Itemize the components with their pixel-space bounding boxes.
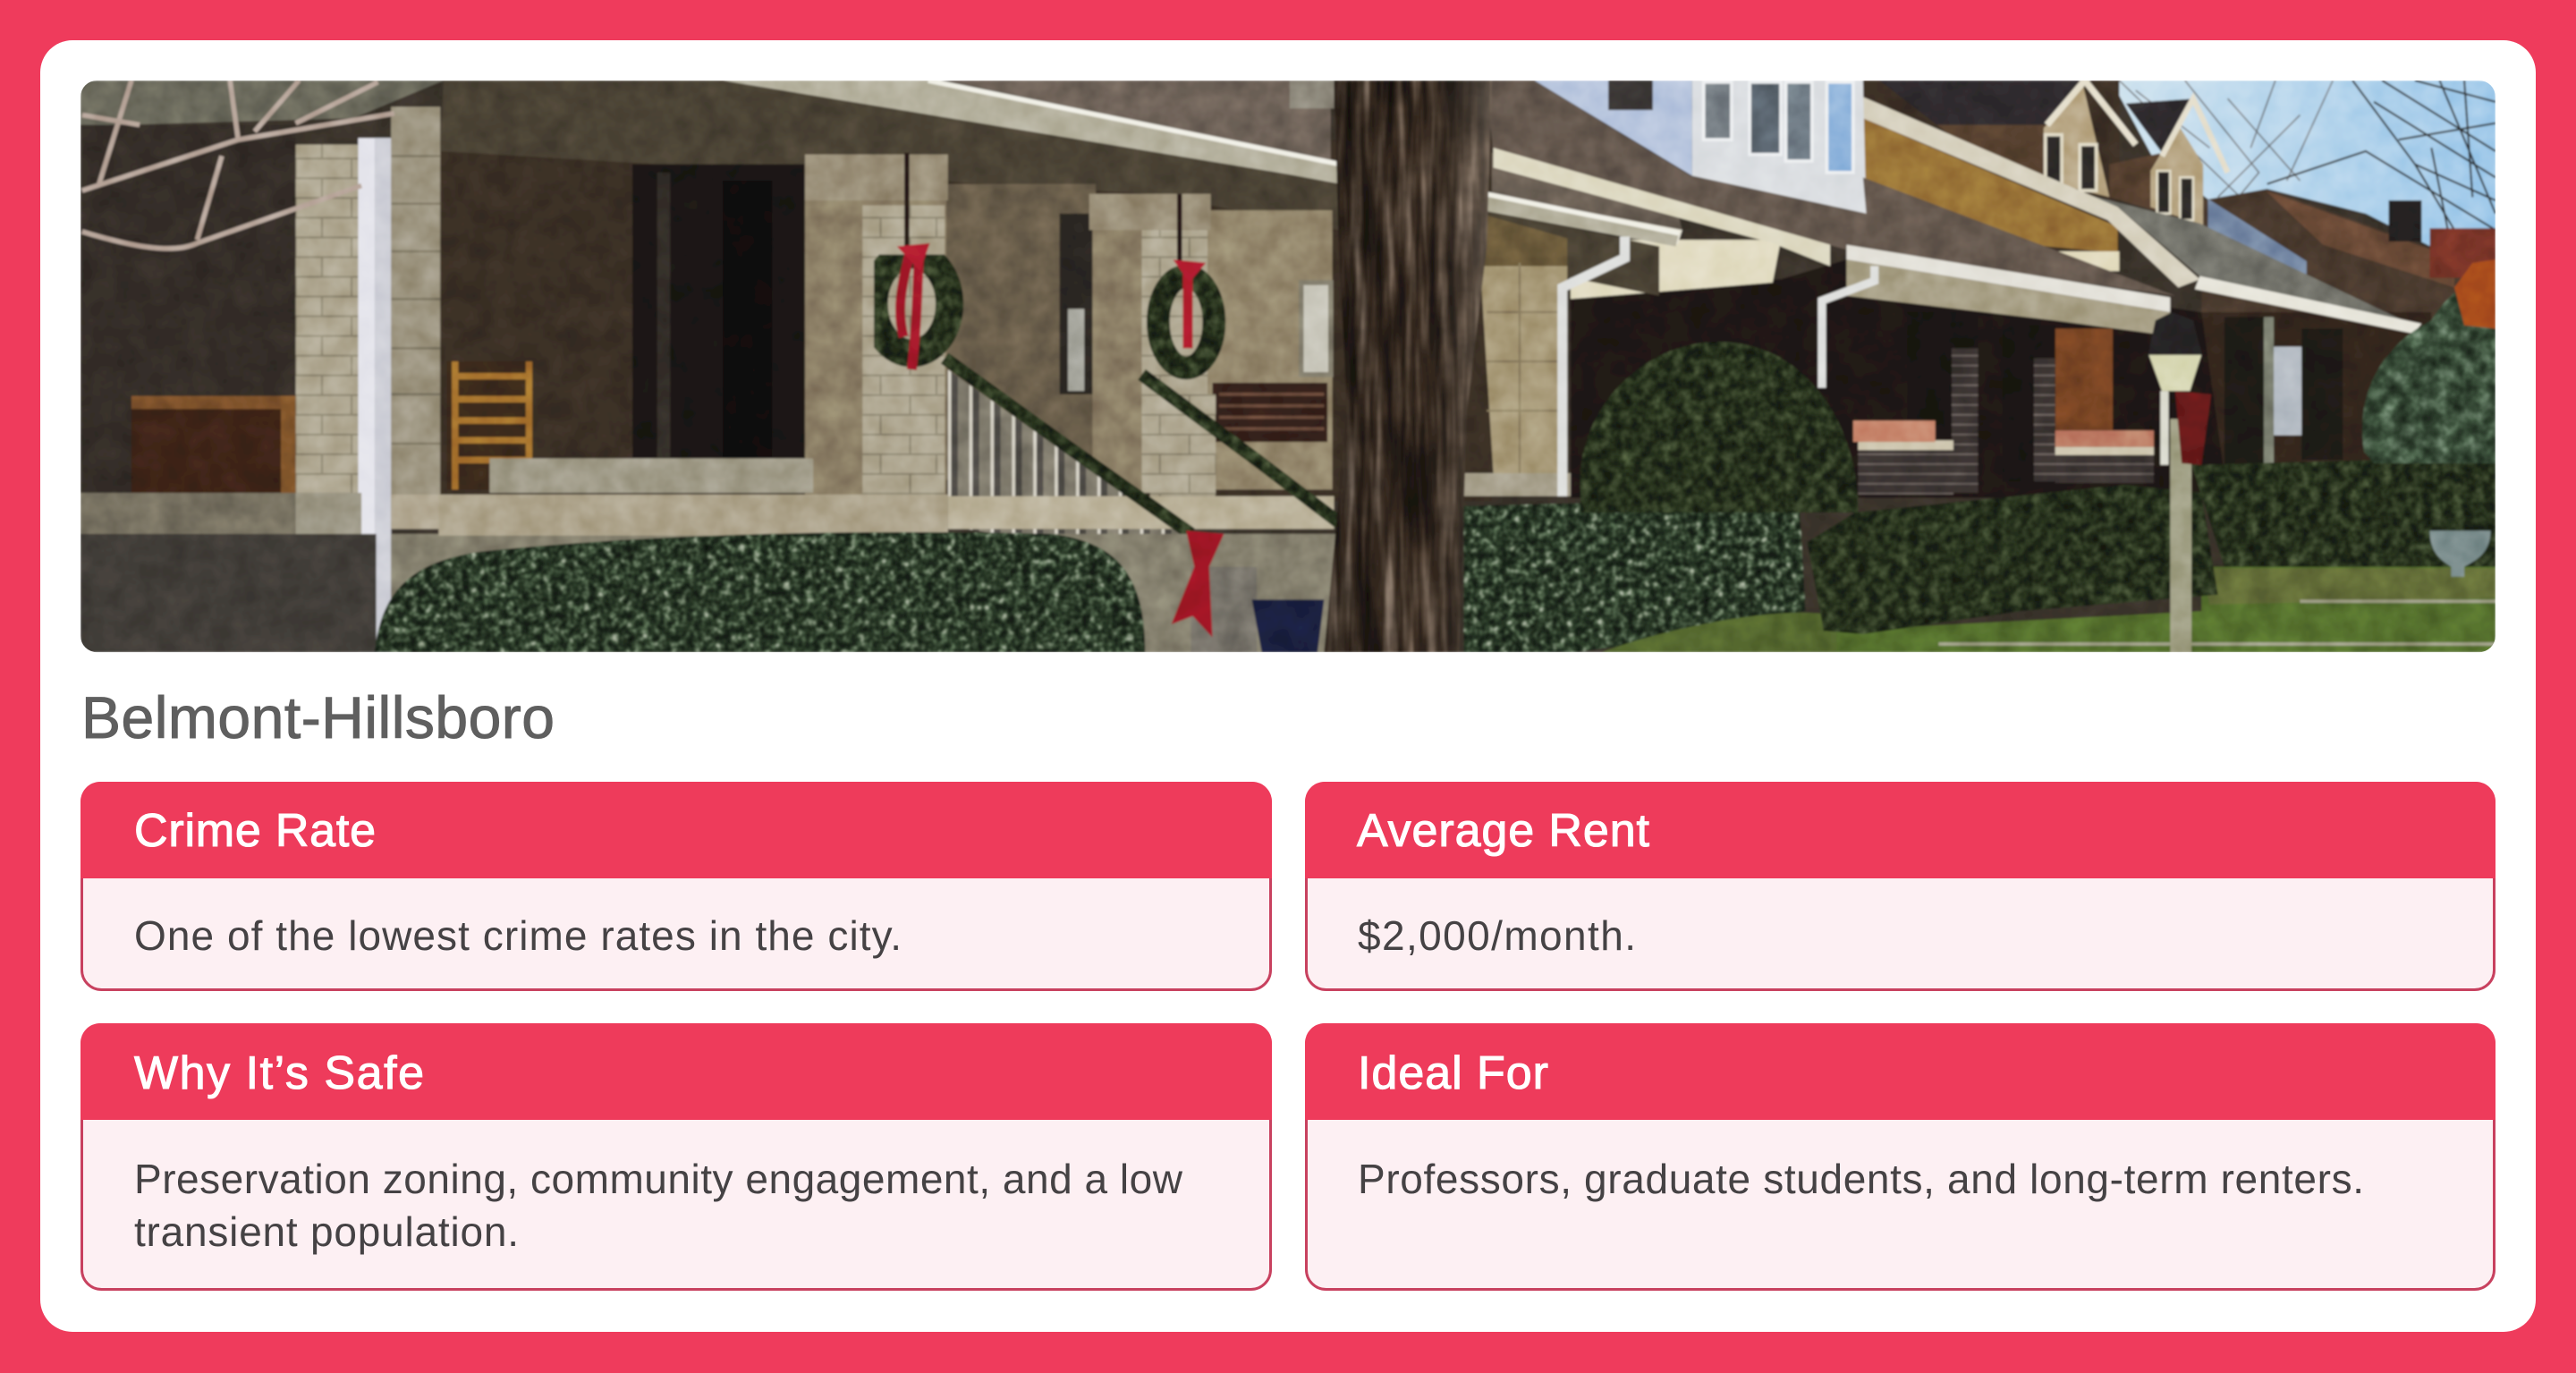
- card: Average Rent: Average Rent: [1357, 805, 1650, 857]
- card: Why It's Safe: Why It’s Safe: [134, 1047, 424, 1099]
- stair railing: [946, 369, 1218, 536]
- card: Crime Rate: [80, 782, 1272, 989]
- orange autumn leaves: [2454, 259, 2496, 328]
- downspouts: [1563, 236, 1875, 496]
- far hedges: [1807, 457, 2496, 634]
- hedge in front of first house: [375, 532, 1145, 652]
- wreaths and garland: [874, 243, 1339, 534]
- porch ledge and lower wall: [80, 458, 1335, 652]
- card: Ideal For: Professors, graduate students, and long-term renters.: [1358, 1156, 2364, 1202]
- card: Average Rent: $2,000/month.: [1358, 912, 1636, 959]
- first stone column with white post: [296, 106, 440, 652]
- second house: dormer with windows: [1535, 81, 1867, 214]
- far houses: [2201, 190, 2496, 318]
- first house: porch back wall and soffit: [80, 81, 1679, 501]
- lamp post: [2148, 312, 2211, 652]
- stone columns with wreath hangers: [805, 153, 1211, 501]
- photo grain: [80, 81, 2496, 652]
- bench and rocking chair: [131, 361, 530, 495]
- card: Ideal For: Ideal For: [1358, 1047, 1548, 1099]
- sky and bare trees: [2117, 81, 2496, 247]
- third house: roof, dormers and porch: [1863, 81, 2431, 468]
- hedge right of tree: [1464, 498, 1806, 652]
- card: Ideal For: [1305, 1023, 2496, 1290]
- stone urn: [2430, 530, 2490, 577]
- second house: roof and trim: [1480, 81, 2175, 335]
- lawn and walkway: [1602, 567, 2496, 652]
- bare branches at upper left: [82, 81, 394, 249]
- tree trunk: [1324, 81, 1492, 652]
- card: Why It's Safe: Preservation zoning, community engagement, and a low: [134, 1156, 1183, 1202]
- heading: Belmont-Hillsboro: [81, 684, 555, 750]
- rounded shrub: [1580, 342, 1858, 513]
- card: Crime Rate: One of the lowest crime rates in the city.: [134, 912, 902, 959]
- photo: houses on Belmont-Hillsboro street: [80, 81, 2496, 652]
- green tree at far right: [2362, 271, 2496, 463]
- red bow and navy pot: [1172, 530, 1324, 652]
- card: Average Rent: [1305, 782, 2496, 989]
- second house: dark porch, brick columns, planters: [1571, 259, 2228, 498]
- card: Crime Rate: Crime Rate: [134, 805, 376, 857]
- card: Why It's Safe: [80, 1023, 1272, 1290]
- card: Why It's Safe: transient population.: [134, 1208, 519, 1255]
- first house: far right stone column: [1462, 214, 1571, 496]
